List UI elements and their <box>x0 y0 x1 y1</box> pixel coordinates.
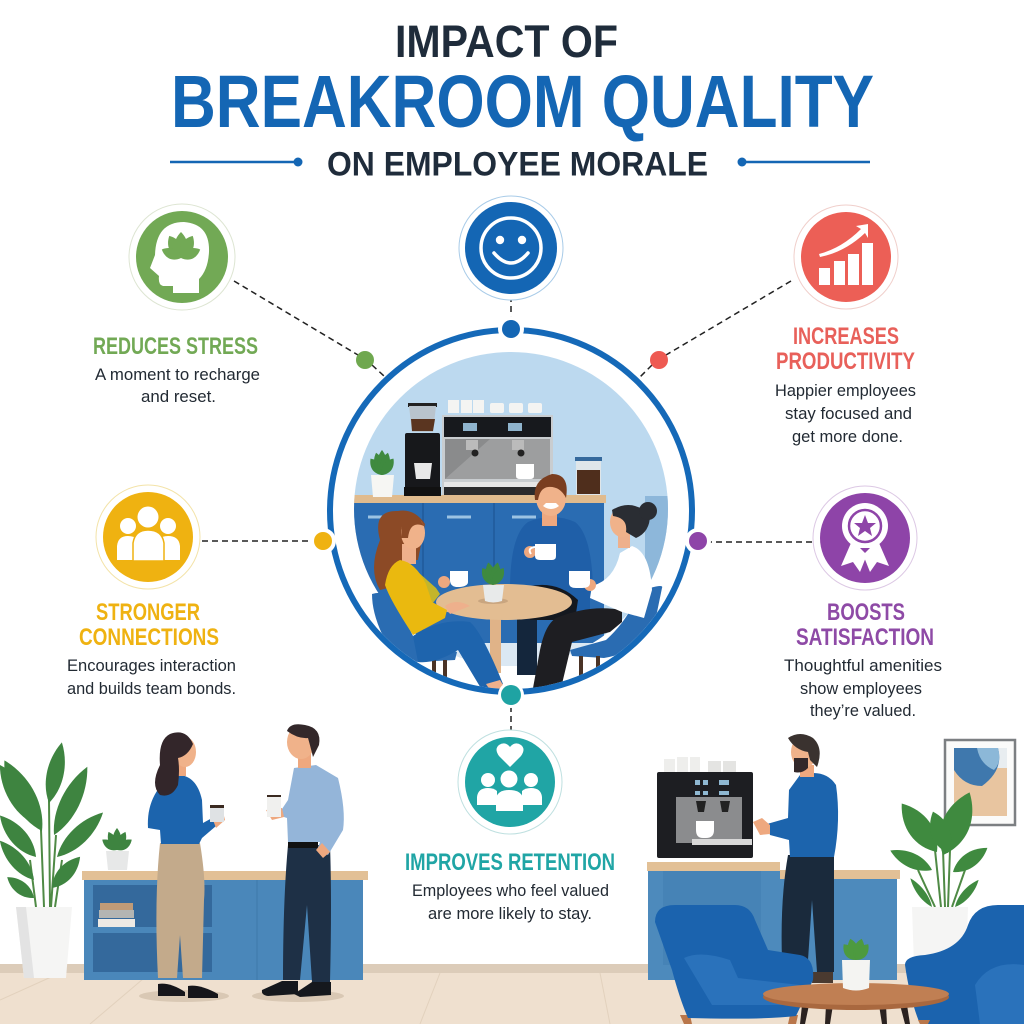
framed wall art <box>945 740 1015 825</box>
panel: stronger connections <box>67 485 236 698</box>
right cabinet <box>647 862 900 980</box>
icon: team with heart <box>458 730 562 834</box>
right plant <box>887 787 992 965</box>
heading: IMPROVES RETENTION <box>405 849 615 876</box>
people and table <box>372 474 662 692</box>
counter plant <box>367 450 397 497</box>
panel: boosts satisfaction <box>784 486 942 720</box>
description: Employees who feel valued <box>412 882 609 900</box>
heading <box>79 599 219 651</box>
heading: STRONGER <box>96 599 200 626</box>
description <box>67 657 236 698</box>
title: IMPACT OF <box>395 16 618 67</box>
heading: REDUCES STRESS <box>93 333 258 360</box>
heading <box>776 323 915 375</box>
coffee jar <box>575 457 602 495</box>
title: ON EMPLOYEE MORALE <box>327 146 708 184</box>
armchair right <box>905 905 1024 1024</box>
icon: group of people <box>96 485 200 589</box>
books <box>98 903 135 927</box>
man at machine <box>753 734 838 983</box>
coffee grinder <box>404 403 441 496</box>
icon: smiley <box>459 196 563 300</box>
heading: SATISFACTION <box>796 624 934 651</box>
cups <box>664 757 736 772</box>
floor <box>0 964 1024 1024</box>
dashed connectors <box>202 281 812 732</box>
title <box>170 16 874 184</box>
espresso machine <box>442 415 553 495</box>
description: A moment to recharge <box>95 366 260 384</box>
central illustration: breakroom scene <box>330 330 692 692</box>
coffee table <box>763 983 949 1024</box>
panel: increases productivity <box>775 205 916 446</box>
heading: PRODUCTIVITY <box>776 348 915 375</box>
description: get more done. <box>792 428 903 446</box>
cups on machine <box>448 400 542 413</box>
panel: reduces stress <box>93 204 260 406</box>
scene background and counter <box>354 352 668 666</box>
icon: rising bars <box>794 205 898 309</box>
description: stay focused and <box>785 405 912 423</box>
title: BREAKROOM QUALITY <box>171 60 874 143</box>
man seated in back <box>510 474 593 692</box>
description: they’re valued. <box>810 702 916 720</box>
coffee table plant <box>840 937 872 990</box>
description: Encourages interaction <box>67 657 236 675</box>
description: Thoughtful amenities <box>784 657 942 675</box>
seated woman right <box>533 502 662 688</box>
armchair left <box>655 905 813 1024</box>
icon: award ribbon <box>813 486 917 590</box>
left plant <box>0 741 109 978</box>
description <box>775 382 916 446</box>
left cabinet <box>82 871 368 980</box>
description: Happier employees <box>775 382 916 400</box>
woman standing <box>139 732 229 1002</box>
heading: INCREASES <box>793 323 899 350</box>
seated woman left <box>372 511 506 690</box>
round table <box>436 584 572 673</box>
table plant <box>478 562 508 604</box>
icon: head with lotus <box>129 204 235 310</box>
ring nodes <box>310 316 711 708</box>
description: and reset. <box>141 388 216 406</box>
description: show employees <box>800 680 922 698</box>
description <box>95 366 260 406</box>
heading: BOOSTS <box>827 599 905 626</box>
small shelf plant <box>100 828 134 870</box>
man standing <box>252 724 344 1002</box>
description: and builds team bonds. <box>67 680 236 698</box>
description <box>412 882 609 923</box>
description: are more likely to stay. <box>428 905 592 923</box>
espresso machine <box>657 757 753 858</box>
outer ring <box>330 330 692 692</box>
heading <box>796 599 934 651</box>
panel: improves retention <box>405 730 615 923</box>
description <box>784 657 942 720</box>
heading: CONNECTIONS <box>79 624 219 651</box>
